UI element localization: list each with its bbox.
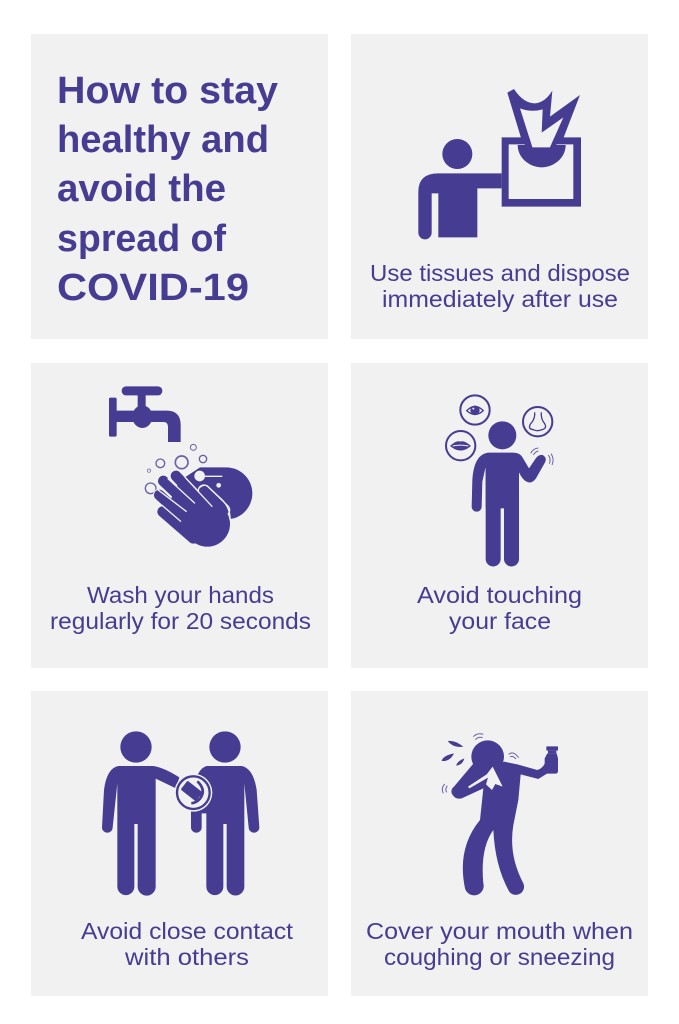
icon: motion marks [531, 448, 553, 465]
panel: title [31, 34, 328, 339]
caption: your face [449, 608, 551, 634]
icon: motion marks [442, 734, 519, 793]
icon: mouth [446, 431, 475, 460]
icon: bottle [545, 746, 558, 774]
caption: Cover your mouth when [366, 918, 633, 944]
icon: right person [191, 731, 259, 895]
title: How to stay [57, 70, 278, 112]
caption: immediately after use [382, 286, 618, 312]
icon: person [472, 421, 546, 566]
caption [366, 918, 633, 970]
icon: person [451, 740, 547, 895]
icon: eye [460, 395, 490, 425]
caption: with others [124, 944, 249, 970]
icon: tap and washing hands [109, 386, 252, 548]
icon: handshake circle [174, 774, 212, 812]
caption: Avoid close contact [81, 918, 294, 944]
title: spread of [57, 218, 226, 260]
icon: hands [157, 467, 252, 548]
caption: Use tissues and dispose [370, 260, 630, 286]
caption [50, 582, 311, 634]
caption [81, 918, 294, 970]
caption: Avoid touching [417, 582, 582, 608]
title: healthy and [57, 119, 269, 161]
icon: person disposing tissue in bin [418, 89, 581, 239]
panel: avoid close contact [31, 691, 328, 996]
icon: person sneezing into tissue [442, 734, 558, 895]
panel: avoid touching face [351, 363, 648, 668]
panel: cover mouth [351, 691, 648, 996]
icon: tissue [468, 767, 503, 790]
caption: coughing or sneezing [384, 944, 615, 970]
icon: two people shaking hands [102, 731, 259, 896]
icon: nose [523, 407, 552, 436]
icon: droplets [442, 741, 464, 766]
title: avoid the [57, 168, 226, 210]
panel: wash hands [31, 363, 328, 668]
icon: bubbles [145, 444, 207, 494]
panel: tissues [351, 34, 648, 339]
icon: left person [102, 731, 179, 896]
title: COVID-19 [57, 267, 249, 309]
icon: person with eye nose and mouth [446, 395, 553, 566]
caption [370, 260, 630, 312]
title [57, 70, 278, 309]
caption: regularly for 20 seconds [50, 608, 311, 634]
icon: tap [109, 386, 181, 442]
caption [417, 582, 582, 634]
caption: Wash your hands [87, 582, 274, 608]
